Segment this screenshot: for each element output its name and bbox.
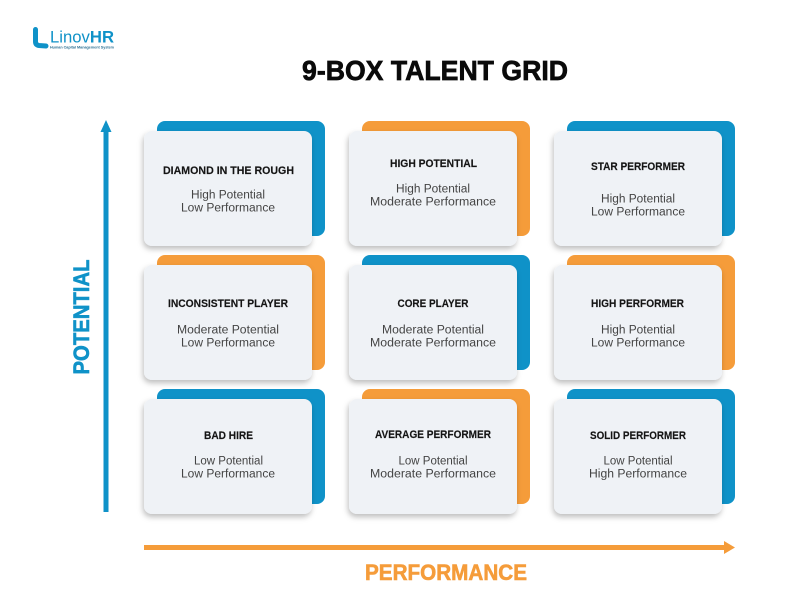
box: solid performer: High Performance — [589, 468, 687, 480]
box: diamond in the rough: High Potential — [191, 190, 265, 202]
box: high performer — [554, 255, 735, 380]
box: high potential: HIGH POTENTIAL — [390, 158, 477, 170]
box: core player: CORE PLAYER — [398, 298, 469, 310]
box: diamond in the rough — [144, 121, 325, 246]
box: high potential: High Potential — [396, 184, 470, 196]
box: diamond in the rough: DIAMOND IN THE ROUGH — [163, 165, 294, 177]
box: inconsistent player: Moderate Potential — [177, 324, 279, 336]
box: average performer: Low Potential — [398, 456, 468, 468]
box: diamond in the rough: Low Performance — [181, 202, 275, 214]
box: average performer: AVERAGE PERFORMER — [375, 429, 491, 441]
box: solid performer — [554, 389, 735, 514]
box: bad hire: Low Potential — [194, 456, 263, 468]
box: bad hire — [144, 389, 325, 514]
box: core player: Moderate Performance — [370, 338, 496, 350]
axis label: performance: PERFORMANCE — [365, 560, 527, 585]
logo: LinovHR: Human Capital Management System — [50, 46, 115, 50]
box: star performer: Low Performance — [591, 206, 685, 218]
box: average performer — [349, 389, 530, 514]
title: 9-BOX TALENT GRID — [302, 55, 568, 86]
box: star performer: STAR PERFORMER — [591, 161, 685, 173]
box: high performer: High Potential — [601, 324, 675, 336]
box: inconsistent player: Low Performance — [181, 338, 275, 350]
axis label: potential: POTENTIAL — [69, 260, 94, 374]
box: bad hire: Low Performance — [181, 468, 275, 480]
box: star performer — [554, 121, 735, 246]
box: average performer: Moderate Performance — [370, 468, 496, 480]
box: inconsistent player: INCONSISTENT PLAYER — [168, 298, 288, 310]
box: high performer: Low Performance — [591, 338, 685, 350]
box: inconsistent player — [144, 255, 325, 380]
logo: LinovHR — [36, 28, 115, 50]
box: high potential — [349, 121, 530, 246]
box: high performer: HIGH PERFORMER — [591, 298, 684, 310]
box: solid performer: SOLID PERFORMER — [590, 430, 686, 442]
box: core player: Moderate Potential — [382, 324, 484, 336]
arrow: potential axis — [100, 120, 112, 512]
box: solid performer: Low Potential — [604, 456, 672, 468]
logo: LinovHR: LinovHR — [50, 28, 114, 46]
arrow: performance axis — [144, 541, 735, 554]
box: bad hire: BAD HIRE — [204, 430, 253, 442]
box: high potential: Moderate Performance — [370, 196, 496, 208]
box: core player — [349, 255, 530, 380]
box: star performer: High Potential — [601, 194, 675, 206]
